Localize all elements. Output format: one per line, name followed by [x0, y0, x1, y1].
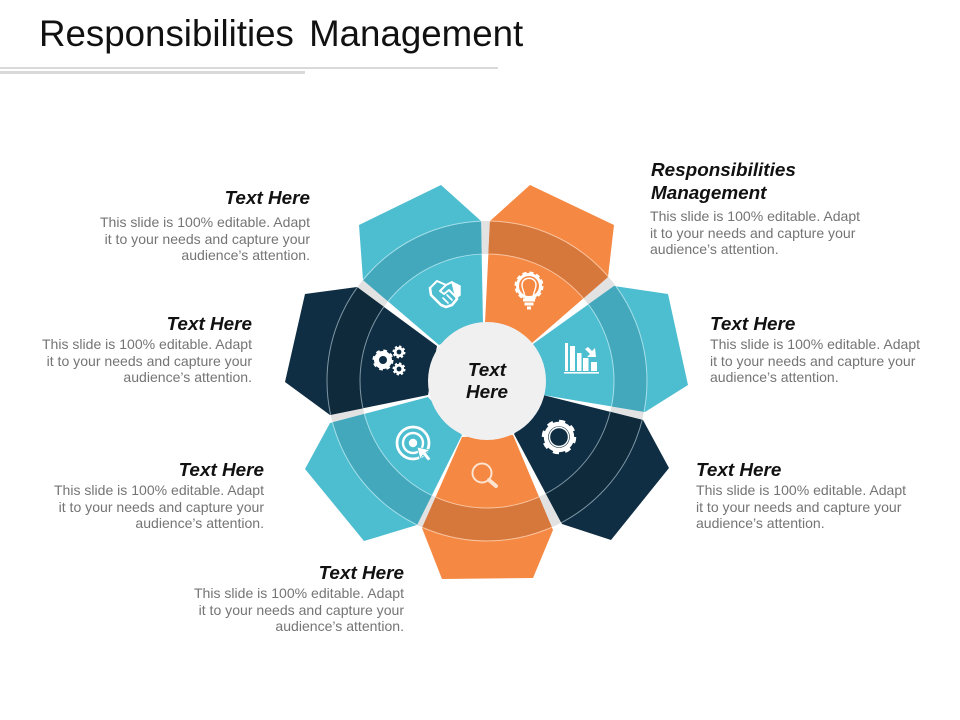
text block: bottom: Text Here: [319, 563, 404, 584]
text block: lower-right: This slide is 100% editable. Adapt: [696, 482, 906, 498]
text block: right: it to your needs and capture your: [710, 352, 915, 368]
petal 6: teal bottom-left: [305, 397, 462, 541]
petal 5: orange bottom: [422, 435, 553, 579]
icon: lightbulb in gear: [516, 273, 542, 308]
text block: top-left: [100, 188, 310, 263]
text block: top-left: audience’s attention.: [181, 247, 310, 263]
icon: three gears: [374, 346, 404, 374]
center hub: Text: [468, 360, 507, 381]
text block: lower-left: Text Here: [179, 460, 264, 481]
text block: lower-left: This slide is 100% editable. Adapt: [54, 482, 264, 498]
text block: responsibilities management: audience’s attention.: [650, 241, 779, 257]
icon: magnifying glass: [472, 464, 496, 486]
text block: responsibilities management: Management: [651, 183, 766, 204]
icon: gear circle: [544, 422, 574, 452]
text block: top-left: it to your needs and capture your: [105, 230, 310, 246]
text block: left: it to your needs and capture your: [47, 352, 252, 368]
grey ring behind the petals: [344, 238, 630, 524]
center hub: [428, 322, 546, 440]
text block: right: This slide is 100% editable. Adapt: [710, 336, 920, 352]
icon: target with cursor: [397, 427, 431, 461]
text block: responsibilities management: This slide is 100% editable. Adapt: [650, 208, 860, 224]
text block: right: audience’s attention.: [710, 369, 839, 385]
text block: lower-left: audience’s attention.: [135, 515, 264, 531]
text block: left: Text Here: [167, 314, 252, 335]
text block: lower-left: it to your needs and capture your: [59, 498, 264, 514]
text block: bottom: it to your needs and capture your: [199, 602, 404, 618]
text block: lower-right: [696, 460, 906, 531]
text block: lower-right: Text Here: [696, 460, 781, 481]
icon: handshake: [430, 281, 460, 307]
petal 1: teal top-left: [359, 185, 483, 345]
text block: left: This slide is 100% editable. Adapt: [42, 336, 252, 352]
text block: top-left: This slide is 100% editable. Adapt: [100, 214, 310, 230]
petal 3: teal right: [533, 286, 688, 412]
text block: right: [710, 314, 920, 385]
text block: lower-right: audience’s attention.: [696, 515, 825, 531]
text block: lower-right: it to your needs and capture your: [696, 498, 901, 514]
text block: bottom: This slide is 100% editable. Adapt: [194, 585, 404, 601]
text block: bottom: audience’s attention.: [275, 618, 404, 634]
title underline: [0, 67, 498, 74]
text block: right: Text Here: [710, 314, 795, 335]
text block: lower-left: [54, 460, 264, 531]
text block: responsibilities management: it to your needs and capture your: [650, 224, 855, 240]
petal wheel diagram: [285, 185, 688, 579]
petal 4: navy bottom-right: [514, 395, 669, 540]
text block: left: [42, 314, 252, 385]
text block: responsibilities management: Responsibilities: [651, 160, 796, 181]
text block: responsibilities management: [650, 160, 860, 257]
text block: left: audience’s attention.: [123, 369, 252, 385]
petal 7: navy left: [285, 287, 437, 415]
petal 2: orange top-right: [485, 185, 614, 343]
icon: bar chart with arrow: [564, 343, 599, 374]
text block: bottom: [194, 563, 404, 634]
center hub: Here: [466, 382, 508, 403]
text block: top-left: Text Here: [225, 188, 310, 209]
title: Responsibilities Management: [39, 13, 523, 54]
